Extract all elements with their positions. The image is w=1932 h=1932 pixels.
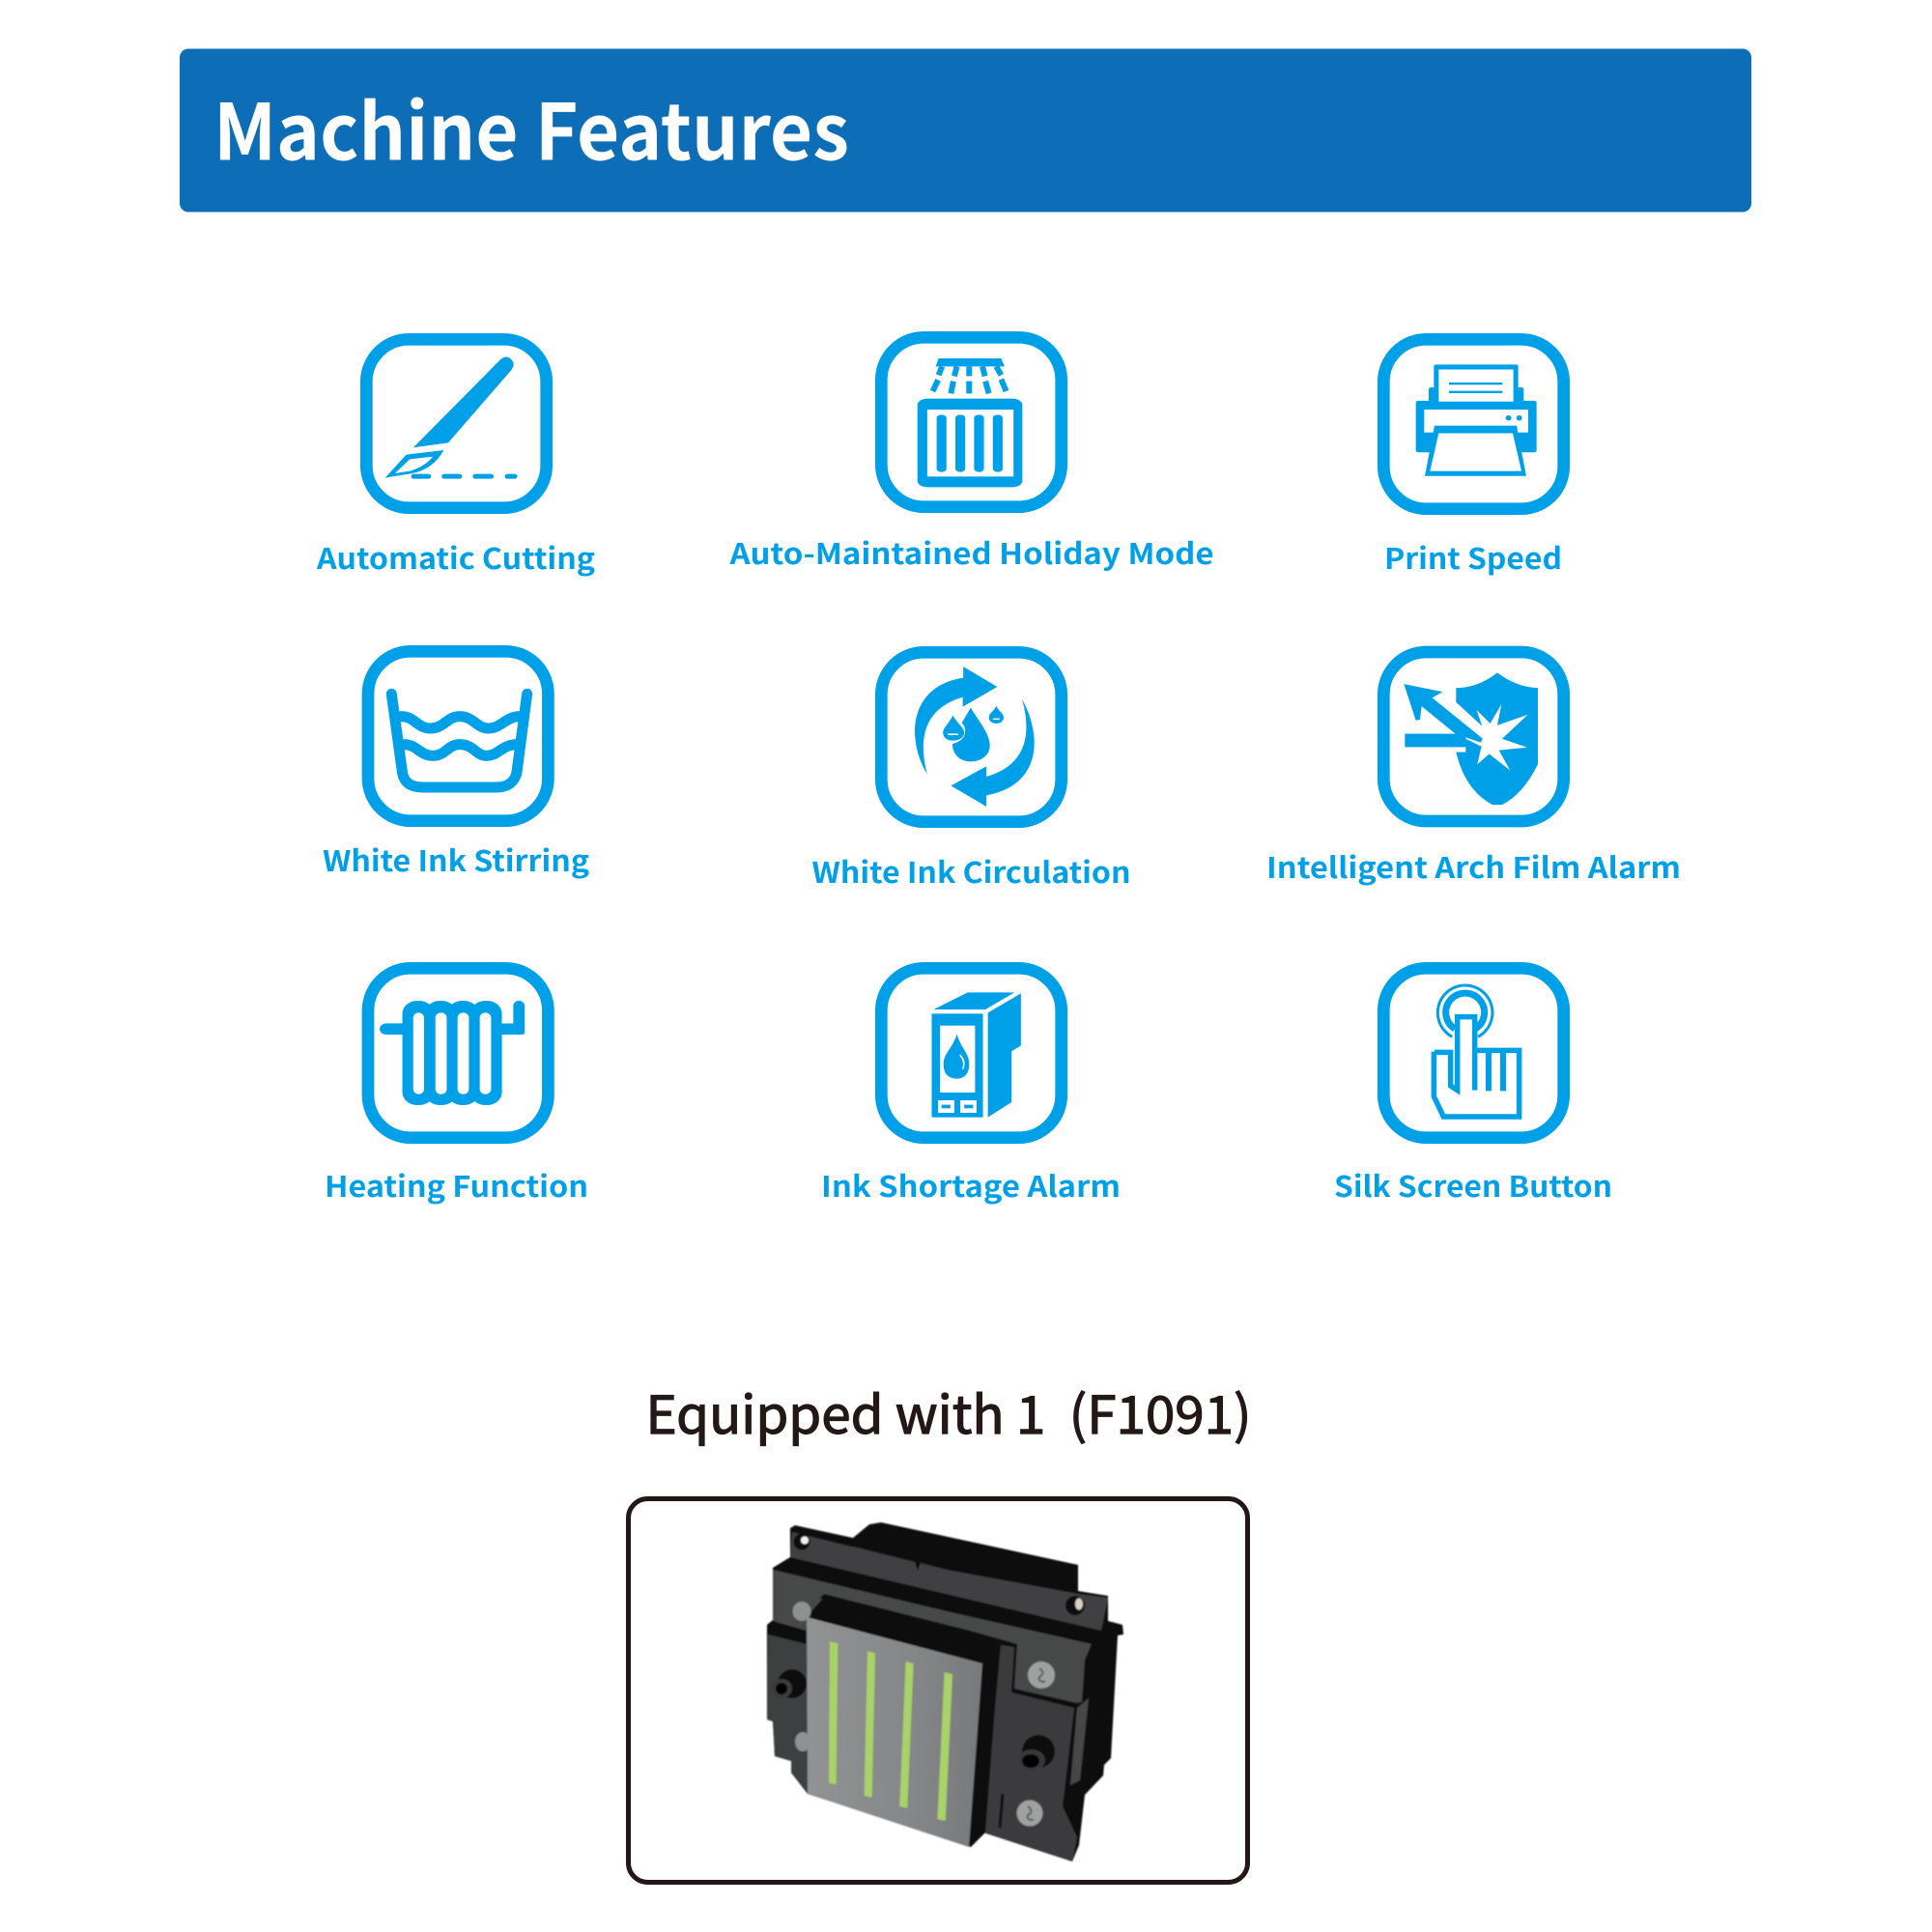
panel: printhead image box: [628, 1499, 1248, 1882]
label: Silk Screen Button: [1334, 1163, 1612, 1206]
icon: spray head over tank: [881, 337, 1062, 507]
icon: circular arrows and drops: [881, 652, 1062, 822]
label: Auto-Maintained Holiday Mode: [728, 530, 1213, 573]
title: Machine Features: [213, 71, 849, 184]
label: Automatic Cutting: [316, 535, 595, 578]
panel: print speed: [1383, 339, 1564, 578]
label: Intelligent Arch Film Alarm: [1266, 844, 1681, 887]
panel: white ink circulation: [811, 652, 1130, 892]
icon: printer: [1383, 339, 1564, 509]
icon: radiator: [368, 968, 548, 1138]
heading: equipped with: Equipped with 1 (F1091): [645, 1373, 1252, 1449]
icon: shield with deflected arrow: [1383, 652, 1564, 821]
title banner: [180, 48, 1751, 213]
icon: ink cartridge: [881, 968, 1062, 1138]
panel: white ink stirring: [323, 651, 589, 880]
panel: heating function: [325, 968, 588, 1206]
label: Heating Function: [325, 1163, 588, 1206]
panel: intelligent arch film alarm: [1266, 652, 1681, 887]
panel: silk screen button: [1334, 968, 1612, 1206]
label: White Ink Stirring: [323, 838, 589, 880]
icon: scalpel: [366, 339, 547, 508]
label: Print Speed: [1384, 535, 1562, 578]
icon: finger pressing button: [1383, 968, 1564, 1138]
label: Ink Shortage Alarm: [821, 1163, 1121, 1206]
icon: tub with waves: [368, 651, 548, 821]
panel: ink shortage alarm: [821, 968, 1121, 1206]
printhead illustration: [767, 1522, 1123, 1861]
panel: automatic cutting: [316, 339, 595, 578]
label: White Ink Circulation: [811, 849, 1130, 892]
panel: holiday mode: [728, 337, 1213, 573]
